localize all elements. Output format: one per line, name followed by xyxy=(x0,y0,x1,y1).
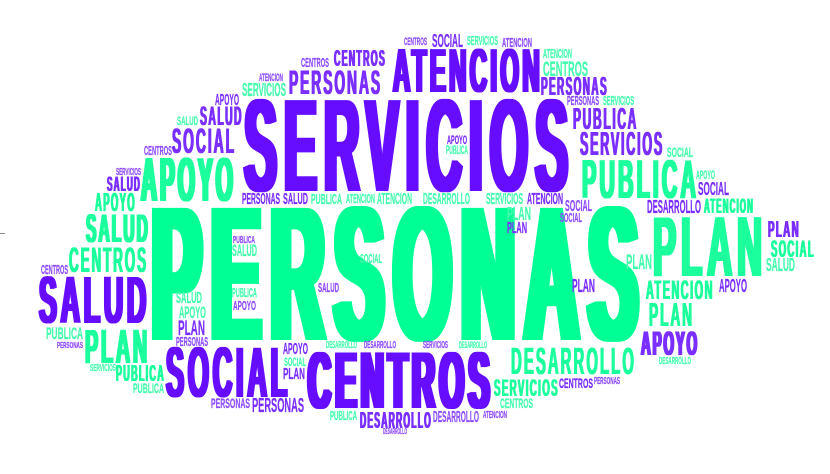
word cloud: SOCIAL xyxy=(360,252,382,266)
word cloud: SERVICIOS xyxy=(423,340,448,351)
word cloud: SERVICIOS xyxy=(580,125,664,162)
word cloud: SALUD xyxy=(39,263,150,338)
word cloud: SALUD xyxy=(176,290,202,307)
word cloud: CENTROS xyxy=(404,36,427,48)
word cloud: DESARROLLO xyxy=(364,340,396,351)
word cloud: CENTROS xyxy=(334,45,386,71)
word cloud: CENTROS xyxy=(144,143,172,158)
word cloud: PUBLICA xyxy=(573,101,638,136)
word cloud: CENTROS xyxy=(500,395,533,411)
word cloud: CENTROS xyxy=(543,58,588,81)
word cloud: PUBLICA xyxy=(446,145,468,157)
word: SOCIAL small: SOCIAL xyxy=(284,357,306,369)
word cloud: PUBLICA xyxy=(311,191,342,208)
word cloud: SERVICIOS xyxy=(494,375,559,402)
word cloud: SOCIAL xyxy=(667,144,693,160)
word cloud: DESARROLLO xyxy=(383,426,407,436)
word cloud: DESARROLLO xyxy=(423,191,470,208)
word cloud: PUBLICA xyxy=(233,235,255,246)
word cloud: PLAN xyxy=(507,203,531,224)
word cloud: CENTROS xyxy=(69,241,148,280)
word cloud: SOCIAL xyxy=(166,334,291,413)
word cloud: APOYO xyxy=(233,298,256,313)
word cloud: PLAN xyxy=(178,317,205,340)
word cloud: ATENCION xyxy=(393,37,543,106)
word cloud: PUBLICA xyxy=(133,380,164,396)
word cloud: SALUD xyxy=(107,173,141,196)
word cloud: DESARROLLO xyxy=(326,340,357,351)
word cloud: PERSONAS xyxy=(176,334,208,349)
word cloud: ATENCION xyxy=(502,36,532,50)
word cloud: PERSONAS xyxy=(567,93,599,108)
word cloud: SERVICIOS xyxy=(467,33,498,48)
word cloud: APOYO xyxy=(215,92,239,109)
word cloud: PUBLICA xyxy=(46,324,83,343)
word cloud: ATENCION xyxy=(543,46,572,61)
word cloud: DESARROLLO xyxy=(360,407,432,433)
word cloud: CENTROS xyxy=(41,262,68,277)
word cloud: APOYO xyxy=(696,170,715,182)
word cloud: PUBLICA xyxy=(232,285,257,300)
word cloud: SOCIAL xyxy=(565,198,592,215)
word cloud: APOYO xyxy=(95,187,136,217)
word cloud: SERVICIOS xyxy=(242,80,286,100)
word cloud: PLAN xyxy=(507,220,527,237)
word cloud: APOYO xyxy=(141,146,236,215)
word cloud: PERSONAS xyxy=(541,71,608,101)
word cloud: APOYO xyxy=(283,341,308,358)
word cloud: PERSONAS xyxy=(242,191,280,208)
word cloud: PERSONAS xyxy=(289,64,382,102)
word cloud: SOCIAL xyxy=(698,178,729,199)
word cloud: SALUD xyxy=(318,281,339,295)
word cloud: PLAN xyxy=(649,296,694,333)
word cloud: SALUD xyxy=(86,207,150,251)
word cloud: PLAN xyxy=(626,251,652,274)
word cloud: PERSONAS xyxy=(211,395,250,411)
word cloud: APOYO xyxy=(447,135,467,147)
word cloud: SALUD xyxy=(283,191,308,208)
word cloud: CENTROS xyxy=(308,336,494,426)
word cloud: ATENCION xyxy=(259,72,283,84)
word cloud: SERVICIOS xyxy=(486,191,523,208)
word cloud: SOCIAL xyxy=(172,122,236,161)
word cloud: SOCIAL xyxy=(432,30,463,51)
word cloud: PUBLICA xyxy=(116,360,165,386)
word cloud: APOYO xyxy=(179,303,206,322)
word cloud: ATENCION xyxy=(483,410,507,421)
word cloud: SALUD xyxy=(232,241,257,260)
word cloud: SOCIAL xyxy=(560,210,582,225)
word cloud: CENTROS xyxy=(559,375,593,391)
word cloud: DESARROLLO xyxy=(647,196,701,217)
word cloud: SALUD xyxy=(200,101,243,131)
word cloud: APOYO xyxy=(719,275,747,296)
word cloud: PLAN xyxy=(85,321,150,374)
word cloud: ATENCION xyxy=(646,275,714,305)
word cloud: PERSONAS xyxy=(594,376,620,387)
word cloud: ATENCION xyxy=(377,191,412,208)
word cloud: SERVICIOS xyxy=(116,167,141,178)
word cloud: SERVICIOS xyxy=(90,363,116,374)
word cloud: DESARROLLO xyxy=(659,356,691,367)
word cloud: PLAN xyxy=(572,275,595,296)
word cloud: DESARROLLO xyxy=(459,340,487,350)
word cloud: PERSONAS xyxy=(252,395,304,417)
word cloud: SALUD xyxy=(766,254,795,275)
word cloud: DESARROLLO xyxy=(433,409,479,426)
word cloud: SERVICIOS xyxy=(603,93,634,108)
word cloud: PUBLICA xyxy=(330,408,357,423)
word: PLAN small: PLAN xyxy=(283,366,305,383)
word cloud: CENTROS xyxy=(301,55,329,70)
word cloud: DESARROLLO xyxy=(511,341,636,383)
word: PERSONAS small: PERSONAS xyxy=(57,340,83,350)
word cloud: ATENCION xyxy=(527,191,563,208)
word cloud: APOYO xyxy=(641,325,699,363)
word cloud: ATENCION xyxy=(346,191,375,206)
word: SALUD small: SALUD xyxy=(177,116,198,128)
